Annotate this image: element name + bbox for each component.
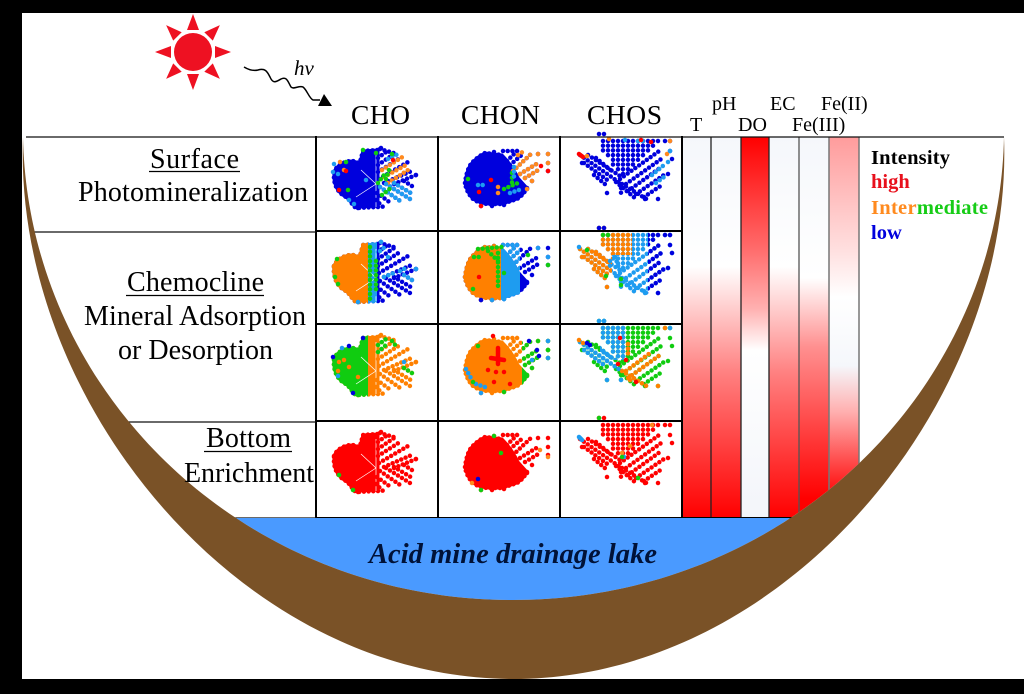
- chart: CHO, CHON, CHOS scatter grid: [333, 134, 672, 492]
- column headings: compound classes: CHON: [461, 99, 540, 130]
- column headings: compound classes: CHO: [351, 99, 410, 130]
- scatter: chemocline upper CHOS: [579, 228, 672, 294]
- scatter: bottom CHON: [465, 435, 548, 490]
- legend: intensity: Intermediate: [871, 197, 988, 219]
- column headings: parameters: DO: [738, 114, 767, 136]
- label: Acid mine drainage lake: Acid mine drainage lake: [367, 539, 657, 570]
- scatter: chemocline upper CHON: [465, 245, 548, 300]
- label: hv: hv: [294, 56, 314, 80]
- arrow: wavy light arrow: [244, 67, 332, 106]
- column headings: parameters: T: [690, 114, 702, 136]
- scatter: chemocline upper CHO: [334, 242, 416, 302]
- scatter: surface CHO: [333, 148, 416, 208]
- icon: sun: [155, 14, 231, 90]
- column headings: parameters: [690, 93, 868, 136]
- legend: intensity: low: [871, 222, 902, 244]
- zone label: chemocline: Chemocline: [127, 267, 264, 298]
- legend: intensity: high: [871, 171, 910, 193]
- zone label: surface: Surface: [150, 144, 239, 175]
- scatter: chemocline lower CHO: [333, 335, 416, 395]
- zone label: bottom: [184, 423, 314, 489]
- legend: intensity: Intensity: [871, 147, 951, 169]
- zone label: chemocline: or Desorption: [118, 335, 273, 366]
- scatter: chemocline lower CHON: [465, 336, 548, 393]
- column headings: parameters: pH: [712, 93, 736, 115]
- scatter: bottom CHO: [334, 432, 416, 492]
- legend: intensity: [871, 147, 988, 244]
- lake water: [236, 518, 790, 600]
- column headings: parameters: EC: [770, 93, 796, 115]
- zone label: bottom: Enrichment: [184, 458, 314, 489]
- column headings: compound classes: CHOS: [587, 99, 662, 130]
- zone label: surface: Photomineralization: [78, 177, 308, 208]
- column headings: parameters: Fe(III): [792, 114, 845, 136]
- scatter: surface CHON: [465, 151, 548, 206]
- zone label: chemocline: [84, 267, 306, 366]
- zone label: surface: [78, 144, 308, 208]
- lake basin: brown sediment crescent: [23, 137, 1004, 679]
- column headings: parameters: Fe(II): [821, 93, 868, 115]
- scatter: surface CHOS: [579, 134, 672, 200]
- scatter: chemocline lower CHOS: [579, 321, 672, 387]
- grid lines: scatter table: [26, 136, 1004, 518]
- zone label: bottom: Bottom: [206, 423, 291, 454]
- chart: lake column bars: [683, 137, 859, 518]
- scatter: bottom CHOS: [579, 418, 672, 484]
- zone label: chemocline: Mineral Adsorption: [84, 301, 306, 332]
- column headings: compound classes: [351, 99, 662, 130]
